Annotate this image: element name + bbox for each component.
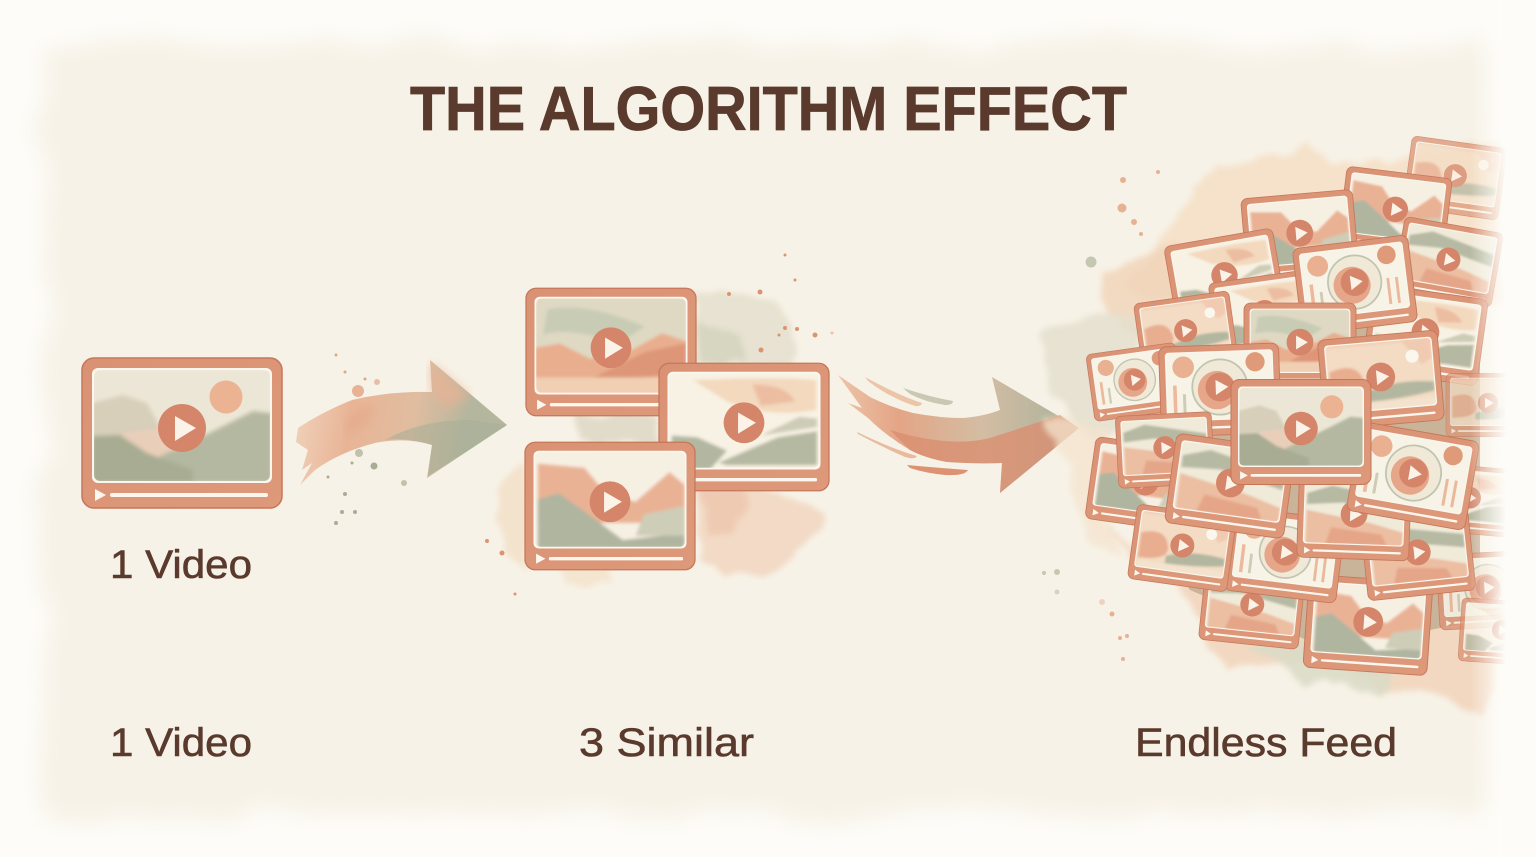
pile card [1198, 564, 1306, 650]
splatter sage [1042, 256, 1096, 594]
pile card [1436, 550, 1536, 630]
pile center card [1231, 380, 1371, 484]
pile card [1360, 509, 1476, 601]
step 2: three similar video cards [525, 288, 829, 570]
pile card [1208, 269, 1322, 361]
step 1: single video card [82, 358, 282, 508]
pile card [1392, 216, 1504, 308]
pile card [1303, 574, 1433, 676]
label: Endless Feed: Endless Feed [1135, 721, 1397, 765]
pile card [1127, 504, 1237, 592]
pile card [1446, 374, 1530, 436]
pile card [1224, 506, 1346, 604]
card: sage valley [659, 363, 829, 491]
label under video card: 1 Video [110, 543, 252, 587]
pile card [1086, 342, 1184, 422]
watercolor wash behind pile [1040, 145, 1500, 720]
pile card [1402, 136, 1508, 220]
pile card [1338, 166, 1452, 258]
pile card [1346, 421, 1480, 531]
card: forest ridge [525, 442, 695, 570]
pile card [1317, 330, 1445, 430]
pile card [1133, 291, 1239, 375]
title: THE ALGORITHM EFFECT [410, 75, 1127, 144]
pile card [1362, 284, 1488, 386]
shadow mass between pile cards [1110, 200, 1480, 650]
label: 3 Similar: 3 Similar [579, 721, 754, 765]
card: orange mountains [526, 288, 696, 416]
pile card [1244, 303, 1356, 387]
right edge fade [1470, 0, 1536, 857]
splatter near pile [1099, 170, 1160, 661]
pile card [1164, 433, 1296, 539]
label: 1 Video: 1 Video [110, 721, 252, 765]
pile card [1115, 412, 1215, 488]
pile card [1241, 189, 1359, 283]
arrow 2 [838, 375, 1079, 493]
pile card [1292, 235, 1418, 335]
pile card [1422, 462, 1518, 538]
pile card [1297, 473, 1411, 561]
pile card [1458, 598, 1536, 666]
arrow 1 [296, 354, 507, 525]
watercolor wash behind three cards [498, 291, 817, 585]
splatter near three cards [485, 254, 834, 596]
pile card [1164, 228, 1286, 328]
pile card [1158, 343, 1282, 437]
pile card [1085, 436, 1205, 534]
step 3: endless pile of video cards [1085, 136, 1536, 676]
